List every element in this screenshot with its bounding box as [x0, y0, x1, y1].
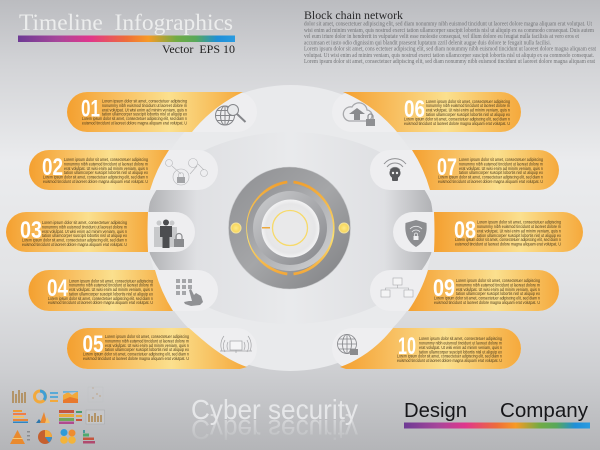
panel: 09: 09: [433, 275, 455, 302]
panel: 04: 04: [47, 275, 69, 302]
panel: 10: tation ullamcorper suscipit lobortis nisl ut aliquip ex: [419, 349, 503, 354]
brand: design: Design: [404, 400, 467, 422]
panel: 06: 06: [404, 96, 425, 123]
panel: 05: erat volutpat. Ut wisi enim ad minim veniam, quis n: [105, 343, 189, 348]
panel: 06: nonummy nibh euismod tincidunt ut laoreet dolore m: [426, 103, 510, 108]
body paragraph: [304, 20, 596, 65]
panel: 09: erat volutpat. Ut wisi enim ad minim veniam, quis n: [456, 287, 540, 292]
panel: 08: [393, 212, 583, 252]
mini: quad circles: [60, 429, 76, 444]
panel: 02: tation ullamcorper suscipit lobortis nisl ut aliquip ex: [64, 170, 149, 175]
mini: horizontal bars: [13, 410, 28, 423]
panel: 02: erat volutpat. Ut wisi enim ad minim veniam, quis n: [64, 166, 148, 171]
panel: 03: euismod tincidunt ut laoreet dolore magna aliquam erat volutpat. U: [22, 242, 127, 247]
icon: cloud upload lock: [343, 103, 375, 126]
panel: 08: euismod tincidunt ut laoreet dolore magna aliquam erat volutpat. U: [455, 242, 561, 247]
central dial: [228, 167, 350, 289]
panel: 10: Lorem ipsum dolor sit amet, consectetuer adipiscing elit, sed diam n: [397, 354, 502, 359]
mini chart icons: [10, 387, 104, 444]
cyber security reflection: Cyber security: [191, 414, 358, 445]
mini: pie: [38, 430, 52, 444]
panel: 03: Lorem ipsum dolor sit amet, consectetuer adipiscing: [42, 220, 127, 225]
dial left dot: [230, 222, 242, 234]
large central disc: [144, 85, 436, 371]
title: Timeline Infographics: [19, 10, 233, 35]
icon: globe lock: [338, 334, 358, 355]
panel: 08: nonummy nibh euismod tincidunt ut laoreet dolore m: [477, 224, 561, 229]
panel: 03: 03: [20, 217, 42, 244]
panel: 05: Lorem ipsum dolor sit amet, consectetuer adipiscing elit, sed diam n: [83, 352, 189, 357]
dial centre disc: [262, 200, 320, 258]
panel: 01: Lorem ipsum dolor sit amet, consectetuer adipiscing: [102, 98, 187, 103]
panel: 07: tation ullamcorper suscipit lobortis nisl ut aliquip ex: [459, 170, 544, 175]
panel: 07: erat volutpat. Ut wisi enim ad minim veniam, quis n: [459, 166, 543, 171]
panel: 02: 02: [42, 154, 63, 181]
panel: 04: nonummy nibh euismod tincidunt ut laoreet dolore m: [69, 283, 153, 288]
dial inner ring: [247, 185, 333, 271]
panel: 03: Lorem ipsum dolor sit amet, consectetuer adipiscing elit, sed diam n: [22, 238, 127, 243]
icon: people lock: [154, 220, 184, 248]
panel: 08: tation ullamcorper suscipit lobortis nisl ut aliquip ex: [477, 233, 562, 238]
panel: 10: erat volutpat. Ut wisi enim ad minim veniam, quis n: [419, 345, 502, 350]
panel: 07: Lorem ipsum dolor sit amet, consectetuer adipiscing elit, sed diam n: [438, 175, 543, 180]
panel: 06: [332, 92, 521, 132]
panel: 05: euismod tincidunt ut laoreet dolore magna aliquam erat volutpat. U: [83, 356, 189, 361]
panel: 01: Lorem ipsum dolor sit amet, consectetuer adipiscing elit, sed diam n: [82, 116, 187, 121]
mini: stacked bars: [83, 430, 95, 444]
panel: 04: [28, 270, 218, 311]
panel: 03: [6, 212, 195, 252]
panel: 03: nonummy nibh euismod tincidunt ut laoreet dolore m: [42, 224, 127, 229]
brand: company: Company: [500, 400, 588, 422]
dial yellow ring: [272, 210, 308, 246]
panel: 02: Lorem ipsum dolor sit amet, consectetuer adipiscing elit, sed diam n: [43, 175, 148, 180]
panel: 05: tation ullamcorper suscipit lobortis nisl ut aliquip ex: [105, 347, 190, 352]
panel: 05: [67, 328, 257, 369]
panel: 01: nonummy nibh euismod tincidunt ut laoreet dolore m: [102, 103, 187, 108]
panel: 04: euismod tincidunt ut laoreet dolore magna aliquam erat volutpat. U: [48, 300, 153, 305]
panel: 06: tation ullamcorper suscipit lobortis nisl ut aliquip ex: [426, 112, 511, 117]
title rainbow bar: [18, 36, 235, 42]
panel: 08: Lorem ipsum dolor sit amet, consectetuer adipiscing elit, sed diam n: [455, 237, 561, 242]
panel: 02: Lorem ipsum dolor sit amet, consectetuer adipiscing: [64, 157, 148, 162]
panel: 06: euismod tincidunt ut laoreet dolore magna aliquam erat volutpat. U: [404, 121, 510, 126]
brand rainbow bar: [404, 422, 590, 428]
dial outer ring: [228, 167, 350, 289]
panel: 01: erat volutpat. Ut wisi enim ad minim veniam, quis n: [102, 107, 187, 112]
icon: keypad touch: [176, 279, 203, 306]
mini: scatter: [88, 387, 103, 402]
panel: 07: euismod tincidunt ut laoreet dolore magna aliquam erat volutpat. U: [438, 179, 543, 184]
panel: 09: [370, 270, 559, 311]
panel: 10: Lorem ipsum dolor sit amet, consectetuer adipiscing: [419, 336, 502, 341]
mini: pyramid: [10, 430, 30, 444]
panel: 07: 07: [437, 154, 457, 181]
panel: 05: nonummy nibh euismod tincidunt ut laoreet dolore m: [105, 338, 189, 343]
icon: computer network: [381, 278, 413, 297]
panel: 08: 08: [454, 217, 476, 244]
panel: 09: Lorem ipsum dolor sit amet, consectetuer adipiscing elit, sed diam n: [434, 296, 540, 301]
panel: 09: nonummy nibh euismod tincidunt ut laoreet dolore m: [456, 282, 540, 287]
panel: 03: erat volutpat. Ut wisi enim ad minim veniam, quis n: [42, 229, 127, 234]
panel: 10: 10: [398, 333, 416, 360]
panel: 09: Lorem ipsum dolor sit amet, consectetuer adipiscing: [456, 278, 540, 283]
panel: 10: nonummy nibh euismod tincidunt ut laoreet dolore m: [419, 340, 502, 346]
panel: 04: erat volutpat. Ut wisi enim ad minim veniam, quis n: [69, 287, 153, 292]
icon: network lock: [166, 158, 208, 185]
icon: wifi skull: [384, 159, 406, 181]
panel: 06: Lorem ipsum dolor sit amet, consectetuer adipiscing: [426, 99, 510, 104]
mini: donut: [34, 391, 58, 402]
panel: 06: Lorem ipsum dolor sit amet, consectetuer adipiscing elit, sed diam n: [404, 116, 510, 121]
panel: 02: [29, 150, 218, 190]
panel: 09: tation ullamcorper suscipit lobortis nisl ut aliquip ex: [456, 291, 541, 296]
mini: bar chart: [12, 390, 26, 403]
panel: 03: tation ullamcorper suscipit lobortis nisl ut aliquip ex: [42, 233, 128, 238]
dial gold arcs: [248, 182, 333, 274]
mini: framed bar chart: [86, 410, 104, 424]
panel: 01: tation ullamcorper suscipit lobortis nisl ut aliquip ex: [102, 112, 188, 117]
body paragraph: accumsan et iusto odio dignissim qui blandit praesent luptatum zzril delenit augue duis dolore te feugait nulla facilisi.: [304, 39, 551, 46]
heading: cyber security: Cyber security: [191, 394, 358, 425]
panel: 01: [67, 92, 257, 132]
panel: 10: euismod tincidunt ut laoreet dolore magna aliquam erat volutpat. U: [397, 358, 502, 363]
panel: 01: 01: [81, 96, 100, 122]
panel: 04: Lorem ipsum dolor sit amet, consectetuer adipiscing elit, sed diam n: [48, 296, 153, 301]
panel: 01: euismod tincidunt ut laoreet dolore magna aliquam erat volutpat. U: [82, 121, 187, 126]
panel: 08: Lorem ipsum dolor sit amet, consectetuer adipiscing: [477, 220, 561, 224]
panel: 06: erat volutpat. Ut wisi enim ad minim veniam, quis n: [426, 108, 510, 113]
panel: 07: Lorem ipsum dolor sit amet, consectetuer adipiscing: [459, 157, 543, 162]
mini: dot matrix: [59, 410, 82, 424]
icon: wireless laptop: [220, 336, 252, 353]
mini: peaks: [36, 412, 50, 423]
panel: 04: Lorem ipsum dolor sit amet, consectetuer adipiscing: [69, 278, 153, 283]
mini: area chart: [63, 391, 78, 403]
panel: 08: erat volutpat. Ut wisi enim ad minim veniam, quis n: [477, 228, 561, 233]
dial right dot: [338, 222, 350, 234]
panel: 10: [332, 328, 521, 369]
icon: wifi shield: [405, 220, 427, 247]
panel: 09: euismod tincidunt ut laoreet dolore magna aliquam erat volutpat. U: [434, 300, 540, 305]
panel: 02: euismod tincidunt ut laoreet dolore magna aliquam erat volutpat. U: [43, 179, 148, 184]
heading: block chain network: Block chain network: [304, 8, 403, 22]
dial tick: [262, 227, 270, 228]
panel: 07: [370, 150, 559, 190]
subtitle: Vector EPS 10: [162, 44, 235, 56]
panel: 07: nonummy nibh euismod tincidunt ut laoreet dolore m: [459, 161, 543, 166]
panel: 05: Lorem ipsum dolor sit amet, consectetuer adipiscing: [105, 334, 189, 339]
panel: 04: tation ullamcorper suscipit lobortis nisl ut aliquip ex: [69, 292, 154, 296]
panel: 05: 05: [82, 331, 104, 358]
icon: globe search: [216, 104, 246, 125]
panel: 02: nonummy nibh euismod tincidunt ut laoreet dolore m: [64, 161, 148, 166]
